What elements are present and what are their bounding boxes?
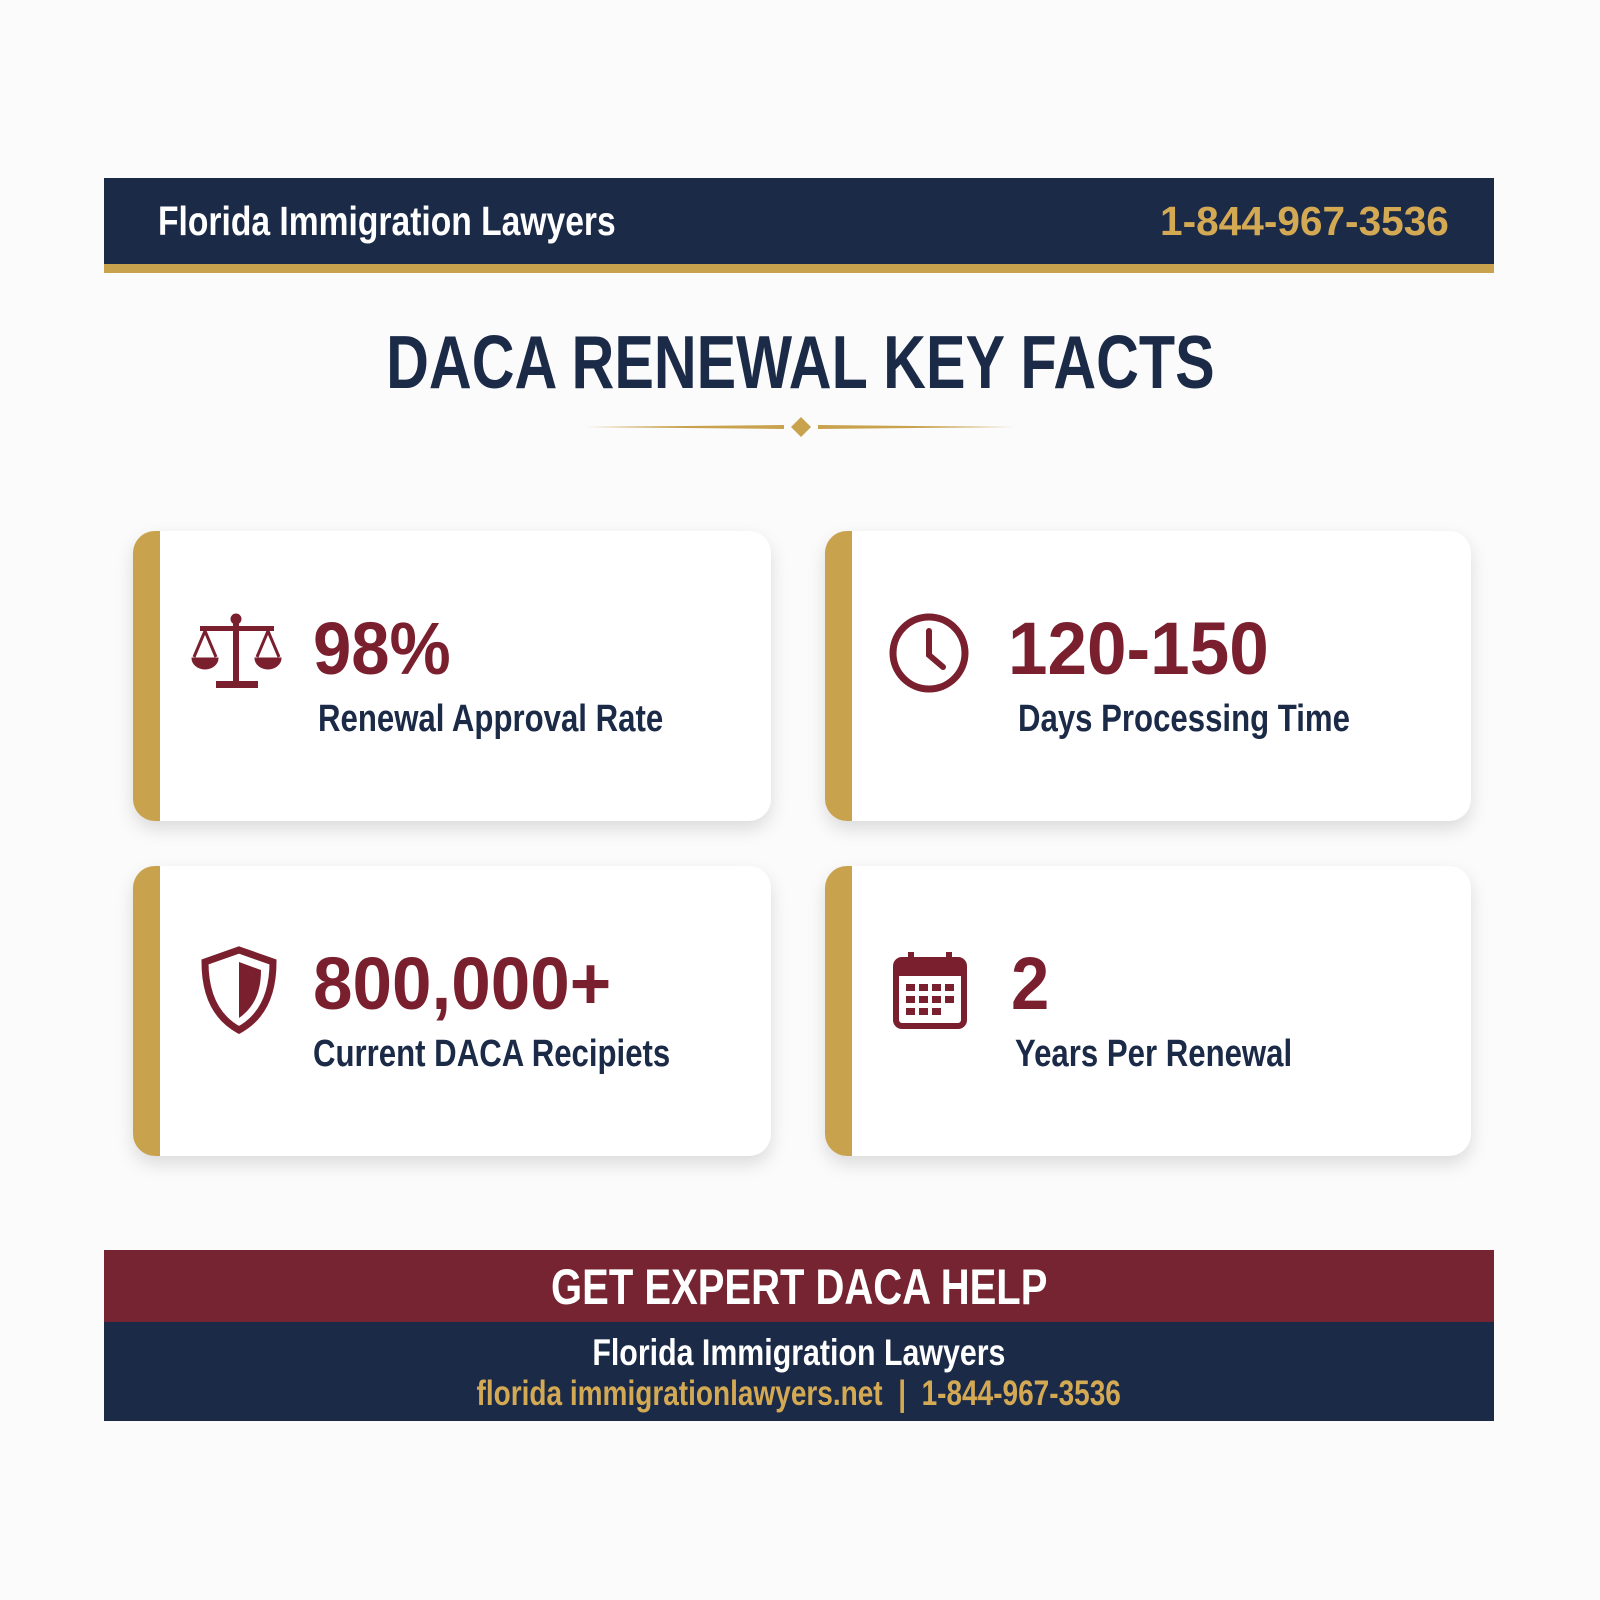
title: DACA RENEWAL KEY FACTS bbox=[386, 320, 1214, 404]
icon: clock bbox=[890, 614, 968, 692]
divider bbox=[588, 417, 1012, 437]
CTA heading: GET EXPERT DACA HELP bbox=[551, 1259, 1047, 1315]
label: Current DACA Recipiets bbox=[313, 1033, 670, 1075]
footer CTA bbox=[104, 1250, 1494, 1421]
icon: scales bbox=[192, 614, 282, 688]
header firm name: Florida Immigration Lawyers bbox=[158, 198, 616, 244]
label: Renewal Approval Rate bbox=[318, 698, 663, 740]
card: recipients bbox=[133, 866, 771, 1156]
icon: shield bbox=[202, 946, 276, 1034]
label: Years Per Renewal bbox=[1015, 1033, 1292, 1075]
card: approval rate bbox=[133, 531, 771, 821]
stat: 98%: 98% bbox=[313, 607, 451, 690]
label: Days Processing Time bbox=[1018, 698, 1350, 740]
card: years per renewal bbox=[825, 866, 1471, 1156]
footer contact: florida immigrationlawyers.net | 1-844-967-3536 bbox=[477, 1374, 1121, 1413]
stat: 2: 2 bbox=[1011, 942, 1049, 1025]
stat: 120-150: 120-150 bbox=[1008, 607, 1269, 690]
card: processing time bbox=[825, 531, 1471, 821]
icon: calendar bbox=[893, 952, 967, 1029]
stat: 800,000+: 800,000+ bbox=[313, 942, 611, 1025]
footer firm name: Florida Immigration Lawyers bbox=[592, 1332, 1006, 1373]
header phone: 1-844-967-3536 bbox=[1160, 198, 1449, 244]
header bar bbox=[104, 178, 1494, 273]
